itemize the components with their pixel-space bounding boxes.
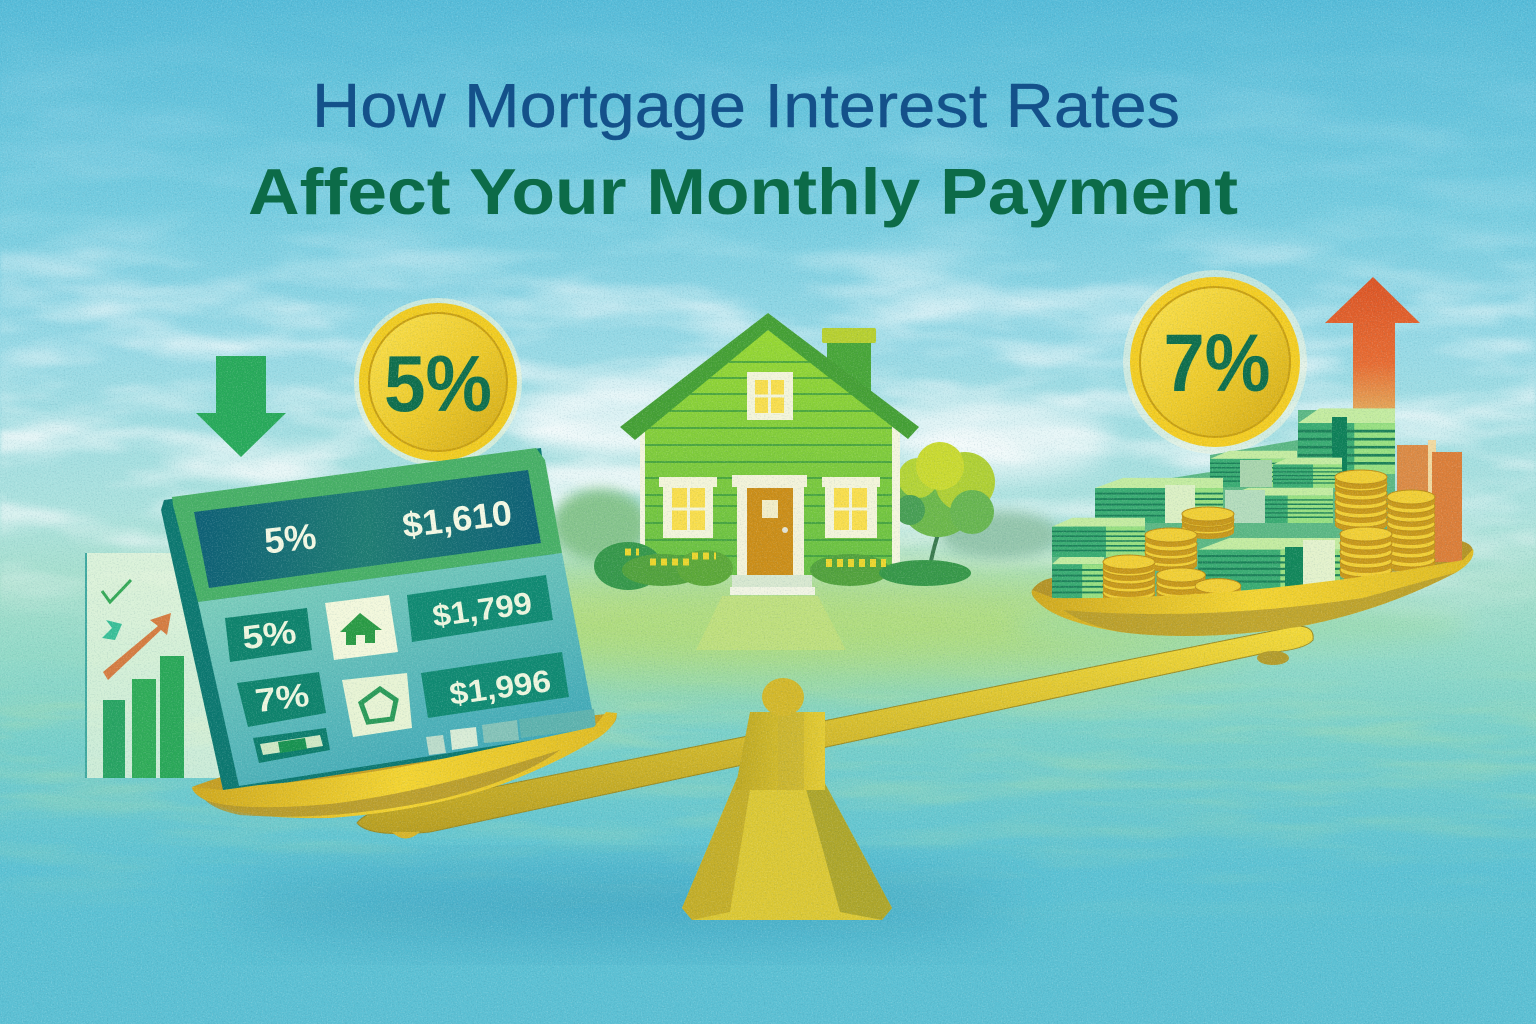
chart card [85,553,270,778]
beam end knobs [392,651,1289,838]
coin stack two [1387,490,1435,572]
bar chart [103,656,184,778]
coin stack three [1340,527,1392,582]
title line one: How Mortgage Interest Rates [312,72,1180,141]
small switch key [253,728,330,763]
right pan bowl shading [1063,572,1457,636]
fulcrum knob [762,678,804,716]
display: 5% [262,515,318,562]
fulcrum base [682,778,892,920]
coin stack seven [1157,568,1205,603]
house [594,313,995,595]
coin stack four [1182,507,1234,539]
title [248,72,1238,228]
right pan front [1032,549,1473,636]
right pan back [1032,540,1473,600]
cash stacks [1052,408,1395,600]
left bushes [594,542,733,590]
coin stack six [1103,555,1155,605]
coin stack one [1335,470,1387,532]
small keys [426,709,596,755]
roof [620,313,919,440]
right bushes [810,554,971,586]
beam [357,626,1313,834]
row one rate button: 5% [240,613,298,656]
left window [659,477,717,538]
row one payment button [407,575,553,642]
right window [822,477,880,538]
calculator [161,448,598,790]
row one rate button [225,608,312,662]
pin [102,620,122,640]
upper window [747,372,793,420]
7 percent coin: 7% [1164,318,1270,409]
row two payment button: $1,996 [447,663,553,712]
row one home tile [325,595,398,660]
coin stack five [1145,528,1197,572]
row one payment button: $1,799 [430,585,534,634]
coin stack eight [1195,579,1241,599]
display: $1,610 [400,493,514,546]
tree [895,442,995,566]
5 percent coin: 5% [384,339,492,428]
7 percent coin [1123,270,1307,454]
up arrow [1325,277,1420,410]
calculator case [161,448,598,790]
meadow path [696,596,846,650]
left pan bowl shading [205,750,560,817]
steps [730,575,815,595]
row two home tile [342,673,412,737]
chart arrow [103,613,171,680]
orange bars [1397,440,1462,562]
keypad body [198,553,596,786]
5 percent coin [354,298,522,466]
left pan back [192,713,617,797]
money backing [1052,410,1436,600]
down arrow [196,356,286,457]
distant tree line [552,489,1060,561]
row two rate button: 7% [253,676,311,719]
chimney [822,328,876,391]
walls [640,330,900,575]
check mark [102,580,131,602]
fulcrum [682,678,892,920]
door [732,475,807,575]
display [194,470,541,588]
fulcrum collar [735,712,825,790]
row two payment button [421,652,569,718]
left pan front [192,712,617,818]
row two rate button [237,672,326,727]
money pile [1052,408,1436,605]
title line two: Affect Your Monthly Payment [248,155,1238,228]
